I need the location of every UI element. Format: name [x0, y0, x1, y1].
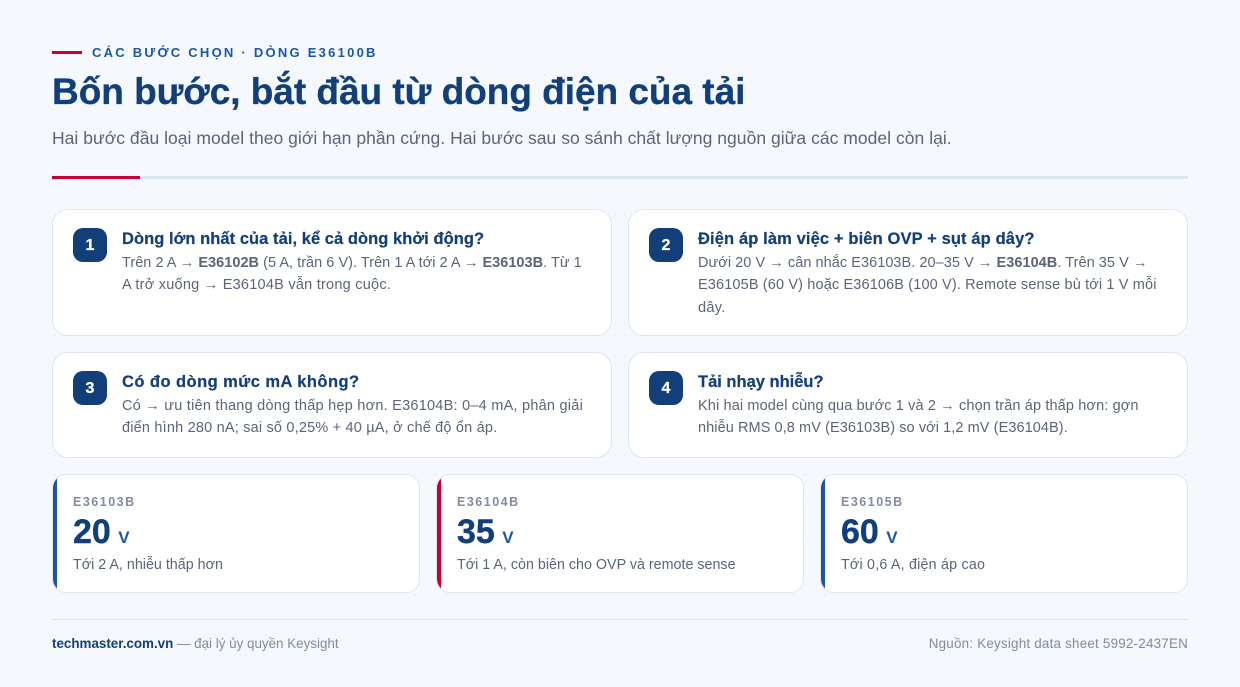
step number 4: 4	[662, 380, 670, 397]
step number 2	[649, 228, 683, 262]
step 1 text	[122, 254, 582, 293]
voltage value: 60 V	[841, 513, 898, 551]
step 1 text: A trở xuống → E36104B vẫn trong cuộc.	[122, 277, 391, 293]
footer right: source: Nguồn: Keysight data sheet 5992-2437EN	[929, 636, 1188, 651]
voltage value: 35 V	[457, 513, 514, 551]
step 3 text	[122, 398, 583, 436]
title: Bốn bước, bắt đầu từ dòng điện của tải	[52, 71, 745, 112]
step 4 heading: Tải nhạy nhiễu?	[698, 373, 824, 391]
step 3 text: điển hình 280 nA; sai số 0,25% + 40 µA, ở chế độ ổn áp.	[122, 420, 497, 436]
step 4 text: Khi hai model cùng qua bước 1 và 2 → chọn trần áp thấp hơn: gợn	[698, 398, 1139, 414]
step 1 heading: Dòng lớn nhất của tải, kể cả dòng khởi động?	[122, 230, 484, 248]
step 3 text: Có → ưu tiên thang dòng thấp hẹp hơn. E36104B: 0–4 mA, phân giải	[122, 398, 583, 414]
step number 3: 3	[86, 380, 94, 397]
step 2 text: dây.	[698, 300, 726, 316]
stat card: E36103B	[52, 474, 420, 593]
model name: E36103B	[73, 495, 136, 509]
stat card: E36105B	[820, 474, 1188, 593]
step 2 heading: Điện áp làm việc + biên OVP + sụt áp dây?	[698, 230, 1035, 248]
panel: step 3	[52, 352, 612, 458]
model name: E36104B	[457, 495, 520, 509]
step number 1: 1	[86, 237, 94, 254]
step 2 text: E36105B (60 V) hoặc E36106B (100 V). Remote sense bù tới 1 V mỗi	[698, 277, 1157, 293]
panel: step 2	[628, 209, 1188, 336]
step number 1	[73, 228, 107, 262]
description: Tới 1 A, còn biên cho OVP và remote sense	[457, 557, 736, 573]
step 1 text: Trên 2 A → E36102B (5 A, trần 6 V). Trên 1 A tới 2 A → E36103B. Từ 1	[122, 254, 582, 270]
step 2 text	[698, 254, 1157, 316]
eyebrow label: CÁC BƯỚC CHỌN · DÒNG E36100B	[92, 45, 378, 60]
model name: E36105B	[841, 495, 904, 509]
description: Tới 2 A, nhiễu thấp hơn	[73, 557, 223, 573]
panel: step 1	[52, 209, 612, 336]
step number 3	[73, 371, 107, 405]
description: Tới 0,6 A, điện áp cao	[841, 557, 985, 573]
footer left: brand: techmaster.com.vn — đại lý ủy quyền Keysight	[52, 636, 339, 651]
subtitle: Hai bước đầu loại model theo giới hạn phần cứng. Hai bước sau so sánh chất lượng nguồn giữa các model còn lại.	[52, 128, 952, 148]
header divider	[52, 176, 1188, 179]
step 2 text: Dưới 20 V → cân nhắc E36103B. 20–35 V → E36104B. Trên 35 V →	[698, 254, 1147, 270]
panel: step 4	[628, 352, 1188, 458]
step number 4	[649, 371, 683, 405]
step 4 text	[698, 398, 1139, 436]
eyebrow accent line	[52, 51, 82, 54]
step number 2: 2	[662, 237, 670, 254]
stat card: E36104B	[436, 474, 804, 593]
step 3 heading: Có đo dòng mức mA không?	[122, 373, 360, 391]
voltage value: 20 V	[73, 513, 130, 551]
step 4 text: nhiễu RMS 0,8 mV (E36103B) so với 1,2 mV (E36104B).	[698, 420, 1068, 436]
